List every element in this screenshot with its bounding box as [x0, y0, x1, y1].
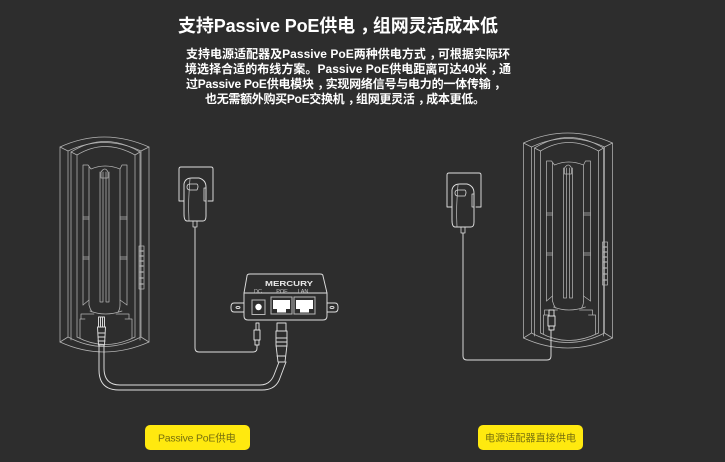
description text block: 支持电源适配器及Passive PoE两种供电方式 ，可根据实际环 [186, 46, 510, 61]
right power cord [463, 233, 551, 360]
PoE injector: POE [276, 289, 288, 295]
title: 支持Passive PoE供电 ，组网灵活成本低 [178, 15, 498, 36]
label: direct power adapter: 电源适配器直接供电 [485, 432, 576, 444]
POE port [271, 297, 292, 314]
left power cord [195, 227, 257, 352]
label: Passive PoE [145, 425, 250, 450]
label: Passive PoE: Passive PoE供电 [158, 432, 236, 444]
diagram: Passive PoE power supply [60, 137, 338, 390]
description text block: 境选择合适的布线方案。Passive PoE供电距离可达40米 ，通 [185, 61, 511, 76]
right power adapter [447, 173, 481, 233]
PoE injector [231, 274, 338, 320]
injector body [231, 274, 338, 320]
LAN port [294, 297, 315, 314]
PoE injector: LAN [298, 289, 308, 295]
ethernet cable between device and injector [99, 345, 286, 390]
injector ethernet plug [276, 323, 287, 362]
left device network connector [98, 317, 106, 345]
brand and port labels: MERCURY [265, 279, 313, 288]
left outdoor device [60, 137, 149, 352]
right device power connector [548, 310, 555, 330]
description text block [185, 46, 511, 106]
DC plug [254, 323, 260, 345]
right outdoor device [524, 133, 612, 348]
PoE injector: DC [254, 289, 262, 295]
DC port [252, 300, 265, 314]
label: direct power adapter [478, 425, 583, 450]
diagram: direct power adapter supply [447, 133, 612, 360]
description text block: 过Passive PoE供电模块 ，实现网络信号与电力的一体传输 ， [186, 76, 506, 91]
description text block: 也无需额外购买PoE交换机 ，组网更灵活 ，成本更低。 [205, 91, 485, 106]
left power adapter [179, 167, 213, 227]
